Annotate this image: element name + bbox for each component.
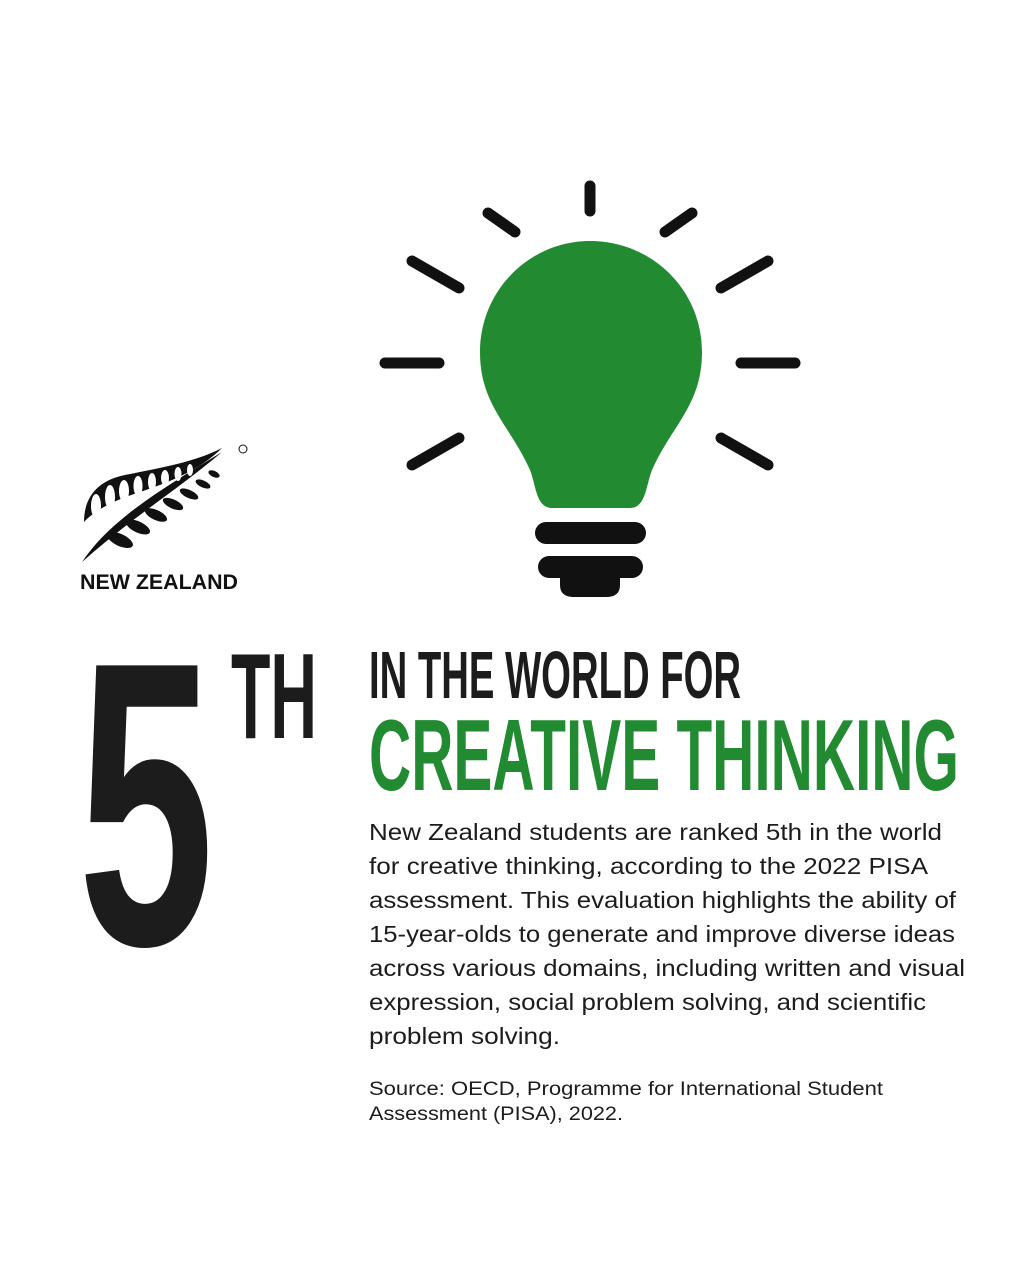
bulb glass <box>480 241 702 508</box>
big rank number: TH <box>231 628 317 764</box>
body text: for creative thinking, according to the 2022 PISA <box>369 853 929 879</box>
icon: light bulb <box>385 186 795 597</box>
bulb base <box>535 522 646 544</box>
source: Source: OECD, Programme for International Student <box>369 1079 884 1100</box>
body text: New Zealand students are ranked 5th in the world <box>369 819 942 845</box>
source: Assessment (PISA), 2022. <box>369 1104 623 1125</box>
body text: problem solving. <box>369 1023 560 1049</box>
rays <box>385 186 795 465</box>
body text: 15-year-olds to generate and improve diverse ideas <box>369 921 955 947</box>
heading <box>369 638 959 812</box>
heading: IN THE WORLD FOR <box>369 638 741 713</box>
logo: New Zealand fern: NEW ZEALAND <box>80 571 238 594</box>
body text: across various domains, including written and visual <box>369 955 965 981</box>
big rank number: 5 <box>78 577 214 1030</box>
body text <box>369 819 965 1049</box>
body text: assessment. This evaluation highlights the ability of <box>369 887 957 913</box>
logo: New Zealand fern <box>80 445 247 594</box>
source <box>369 1079 884 1125</box>
body text: expression, social problem solving, and scientific <box>369 989 926 1015</box>
